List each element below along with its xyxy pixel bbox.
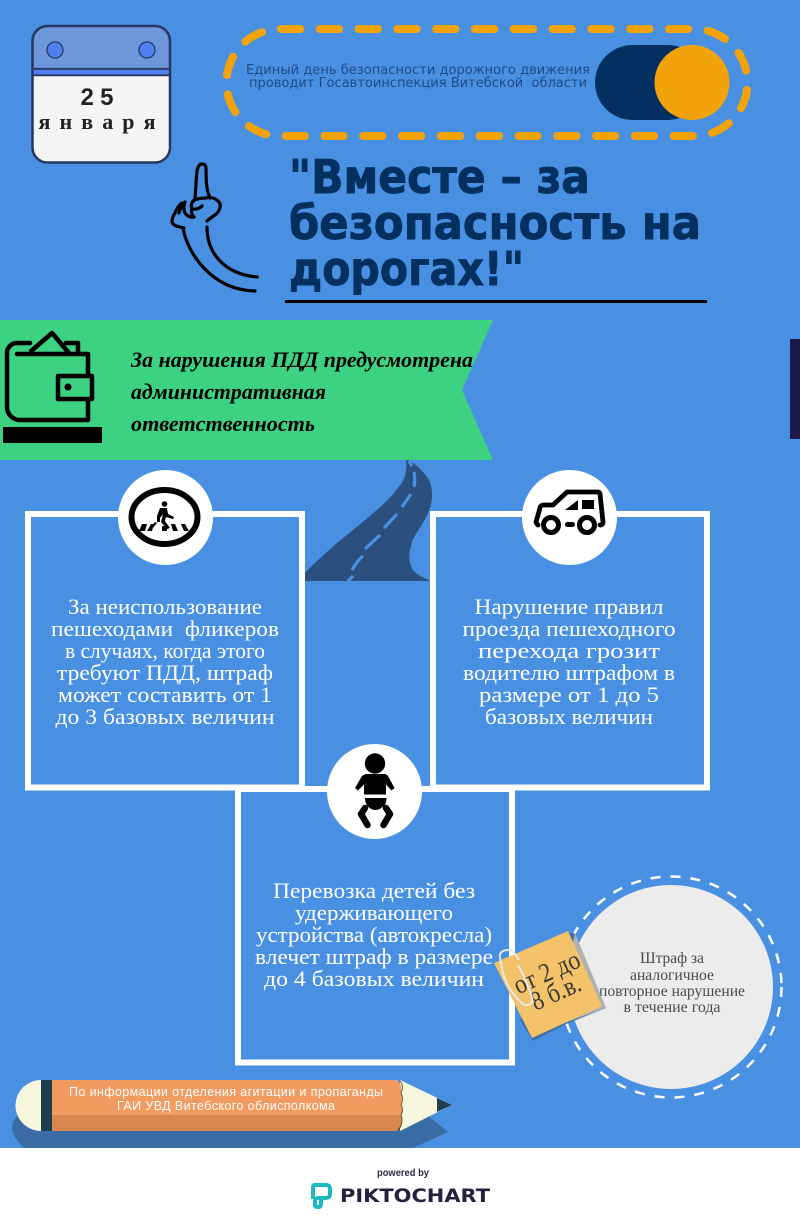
pencil: ГАИ УВД Витебского облисполкома — [117, 1099, 335, 1113]
title: дорогах!" — [289, 242, 524, 296]
sticky note — [494, 931, 606, 1041]
ribbon banner — [0, 320, 493, 460]
footer — [0, 1148, 800, 1228]
banner text: ответственность — [131, 411, 315, 436]
panel: child seat fine — [238, 789, 512, 1062]
panel: pedestrian fine: может составить от 1 — [58, 682, 272, 707]
callout: repeat violation circle — [560, 876, 782, 1098]
icon: wallet — [3, 333, 102, 443]
panel: pedestrian fine: пешеходами фликеров — [51, 616, 279, 641]
title underline — [285, 300, 707, 303]
panel: child seat fine: Перевозка детей без — [273, 878, 475, 903]
panel: child seat fine: влечет штраф в размере — [255, 944, 493, 969]
right edge bar — [790, 339, 800, 439]
banner text: За нарушения ПДД предусмотрена — [130, 347, 473, 372]
icon: piktochart logo — [313, 1185, 330, 1207]
callout: repeat violation circle: аналогичное — [630, 967, 714, 984]
panel: driver fine — [433, 514, 707, 788]
panel: pedestrian fine — [28, 514, 302, 788]
panel: pedestrian fine: требуют ПДД, штраф — [57, 660, 273, 685]
footer: PIKTOCHART — [340, 1185, 490, 1207]
icon: pedestrian crossing — [118, 470, 213, 565]
title — [289, 150, 701, 296]
calendar icon: 25 — [80, 84, 114, 111]
footer: powered by — [377, 1168, 429, 1179]
banner text — [130, 347, 473, 436]
panel: driver fine: Нарушение правил — [474, 594, 664, 619]
panel: child seat fine: устройства (автокресла) — [256, 922, 492, 947]
callout: repeat violation circle: повторное нарушение — [599, 983, 745, 1000]
header text — [246, 63, 590, 91]
panel: driver fine: базовых величин — [485, 704, 653, 729]
panel: driver fine: водителю штрафом в — [463, 660, 675, 685]
panel: child seat fine: до 4 базовых величин — [264, 966, 484, 991]
pencil — [12, 1080, 452, 1148]
road — [305, 460, 432, 581]
header text: проводит Госавтоинспекция Витебской области — [249, 76, 587, 91]
panel: pedestrian fine: в случаях, когда этого — [65, 638, 265, 663]
title: безопасность на — [289, 196, 701, 250]
toggle icon — [595, 45, 730, 120]
callout: repeat violation circle: в течение года — [624, 999, 721, 1016]
sticky note: от 2 до — [509, 944, 585, 1000]
panel: child seat fine: удерживающего — [295, 900, 453, 925]
panel: driver fine: проезда пешеходного — [462, 616, 676, 641]
header text: Единый день безопасности дорожного движения — [246, 63, 590, 78]
banner text: административная — [131, 379, 326, 404]
calendar icon — [32, 26, 170, 162]
icon: pointing hand — [172, 164, 257, 291]
icon: baby — [327, 744, 422, 839]
icon: car — [522, 470, 617, 565]
sticky note: 8 б.в. — [526, 968, 585, 1016]
title: "Вместе – за — [289, 150, 590, 204]
callout: repeat violation circle: Штраф за — [640, 950, 704, 967]
pencil: По информации отделения агитации и пропаганды — [69, 1085, 383, 1099]
dashed pill frame — [226, 29, 748, 136]
panel: driver fine: размере от 1 до 5 — [479, 682, 659, 707]
panel: driver fine: перехода грозит — [478, 638, 660, 663]
panel: pedestrian fine: За неиспользование — [68, 594, 262, 619]
calendar icon: января — [38, 109, 156, 134]
icon: paperclip — [500, 950, 532, 1005]
panel: pedestrian fine: до 3 базовых величин — [56, 704, 275, 729]
